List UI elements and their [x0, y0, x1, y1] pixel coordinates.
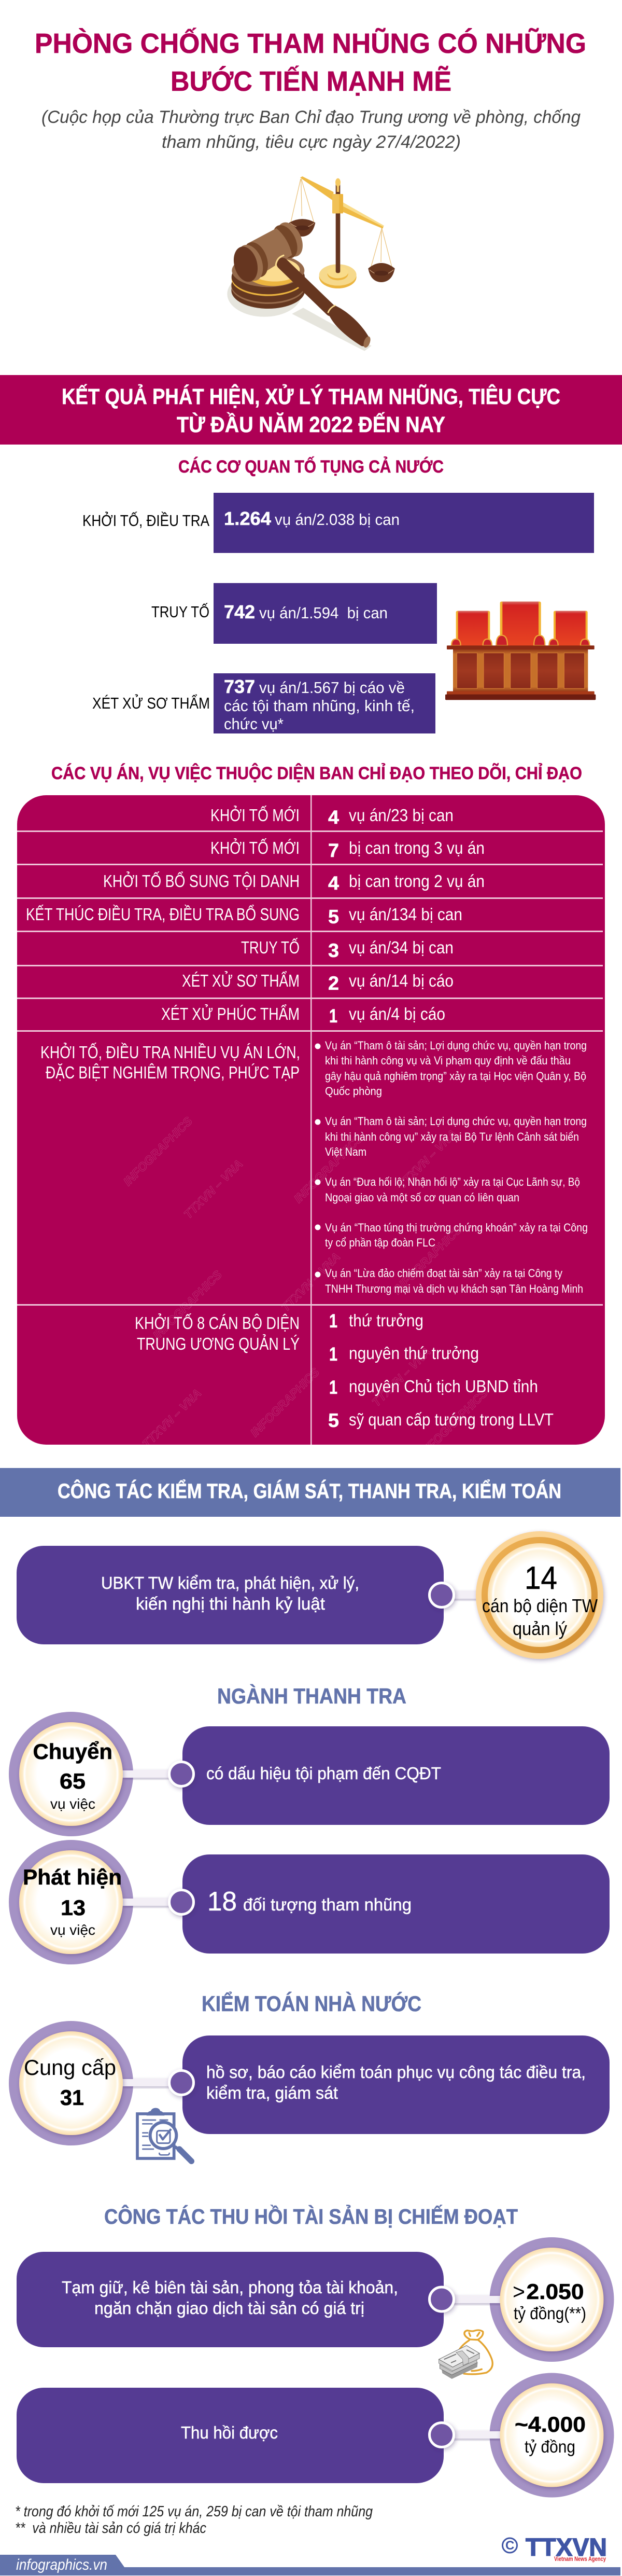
- list: officials: thứ trưởng: [349, 1311, 423, 1330]
- bullet list: major cases: Vụ án “Lừa đảo chiếm đoạt tài sản” xảy ra tại Công ty: [325, 1267, 562, 1280]
- icon: scales: [289, 176, 395, 288]
- row: khởi tố bổ sung tội danh: 4: [328, 872, 339, 894]
- callout: UBKT TW: kiến nghị thi hành kỷ luật: [136, 1594, 325, 1613]
- row: khởi tố bổ sung tội danh: bị can trong 2 vụ án: [349, 871, 485, 891]
- callout: phát hiện 13 vụ việc: vụ việc: [50, 1922, 95, 1938]
- row: khởi tố bổ sung tội danh: KHỞI TỐ BỔ SUNG TỘI DANH: [103, 871, 300, 891]
- bar: truy tố: vụ án/1.594 bị can: [259, 604, 388, 622]
- heading: asset recovery: CÔNG TÁC THU HỒI TÀI SẢN BỊ CHIẾM ĐOẠT: [104, 2205, 518, 2228]
- row: kết thúc điều tra: KẾT THÚC ĐIỀU TRA, ĐIỀU TRA BỔ SUNG: [26, 905, 300, 924]
- bar: truy tố: 742: [224, 601, 255, 622]
- callout: cung cấp 31: kiểm tra, giám sát: [206, 2083, 338, 2102]
- bar: xét xử sơ thẩm: 737: [224, 676, 255, 697]
- row: khởi tố mới 2: bị can trong 3 vụ án: [349, 838, 485, 857]
- icon: gavel and scales: [227, 176, 395, 351]
- logo: TTXVN: C: [505, 2539, 514, 2553]
- callout: tạm giữ: 2.050: [527, 2279, 584, 2304]
- logo: TTXVN: Vietnam News Agency: [554, 2555, 606, 2563]
- panel: cases table: [17, 795, 605, 1460]
- callout: thu hồi được: tỷ đồng: [525, 2437, 575, 2456]
- row: truy tố: vụ án/34 bị can: [349, 938, 454, 957]
- callout: tạm giữ: >: [513, 2279, 525, 2304]
- list: officials: [328, 1310, 554, 1431]
- heading: agencies: CÁC CƠ QUAN TỐ TỤNG CẢ NƯỚC: [178, 456, 444, 477]
- callout: cung cấp 31: Cung cấp: [24, 2055, 116, 2080]
- bar: khởi tố, điều tra: KHỞI TỐ, ĐIỀU TRA: [82, 511, 209, 530]
- bar: xét xử sơ thẩm: vụ án/1.567 bị cáo về: [259, 678, 405, 697]
- logo: TTXVN: TTXVN: [526, 2534, 607, 2561]
- bar: khởi tố, điều tra: vụ án/2.038 bị can: [275, 510, 400, 529]
- row: xét xử sơ thẩm: 2: [328, 973, 339, 994]
- callout: chuyển 65 vụ việc: vụ việc: [50, 1796, 95, 1812]
- bullet list: major cases: Vụ án “Đưa hối lộ; Nhận hối lộ” xảy ra tại Cục Lãnh sự, Bộ: [325, 1175, 580, 1188]
- bar: xét xử sơ thẩm: XÉT XỬ SƠ THẨM: [92, 694, 210, 712]
- subtitle: tham nhũng, tiêu cực ngày 27/4/2022): [162, 132, 461, 152]
- panel: cases table: INFOGRAPHICS: [390, 1222, 464, 1297]
- row: xét xử phúc thẩm: XÉT XỬ PHÚC THẨM: [161, 1004, 300, 1023]
- row: xét xử phúc thẩm: [161, 1004, 445, 1027]
- heading: ngành thanh tra: NGÀNH THANH TRA: [217, 1684, 406, 1708]
- list: officials: 5: [328, 1410, 339, 1431]
- subtitle: (Cuộc họp của Thường trực Ban Chỉ đạo Trung ương về phòng, chống: [41, 107, 581, 127]
- bullet list: major cases: khi thi hành công vụ và Vi phạm quy định về đấu thầu: [325, 1054, 571, 1067]
- bullet list: major cases: Vụ án “Tham ô tài sản; Lợi dụng chức vụ, quyền hạn trong: [325, 1115, 587, 1128]
- icon: clipboard with magnifier: [137, 2108, 191, 2161]
- row: khởi tố bổ sung tội danh: [103, 871, 485, 894]
- row: khởi tố mới 1: KHỞI TỐ MỚI: [210, 805, 300, 825]
- footer bar: [0, 2555, 620, 2575]
- callout: thu hồi được: Thu hồi được: [181, 2423, 278, 2442]
- row: truy tố: TRUY TỐ: [241, 937, 300, 957]
- row: khởi tố mới 1: vụ án/23 bị can: [349, 806, 454, 825]
- section banner: results: [0, 375, 622, 445]
- row: truy tố: 3: [328, 940, 339, 961]
- callout: cung cấp 31: [9, 2021, 610, 2145]
- section banner: inspection: [0, 1468, 620, 1517]
- list: officials: nguyên Chủ tịch UBND tỉnh: [349, 1377, 538, 1396]
- row: xét xử sơ thẩm: [182, 971, 454, 994]
- callout: chuyển 65 vụ việc: [9, 1712, 610, 1836]
- callout: tạm giữ: [17, 2237, 614, 2362]
- row: xét xử sơ thẩm: vụ án/14 bị cáo: [349, 971, 454, 990]
- panel: cases table: INFOGRAPHICS: [416, 1386, 490, 1460]
- subtitle: [41, 107, 581, 152]
- list: officials: 1: [329, 1344, 337, 1365]
- list: officials: sỹ quan cấp tướng trong LLVT: [349, 1410, 554, 1429]
- bullet list: major cases: ty cổ phần tập đoàn FLC: [325, 1236, 435, 1249]
- row: officials label: KHỞI TỐ 8 CÁN BỘ DIỆN: [135, 1313, 300, 1333]
- panel: cases table: TTXVN – VNA: [369, 1345, 433, 1409]
- callout: cung cấp 31: hồ sơ, báo cáo kiểm toán phục vụ công tác điều tra,: [206, 2062, 586, 2082]
- callout: UBKT TW: UBKT TW kiểm tra, phát hiện, xử lý,: [101, 1573, 359, 1592]
- row: khởi tố mới 2: [210, 838, 485, 861]
- title: BƯỚC TIẾN MẠNH MẼ: [171, 66, 451, 97]
- panel: cases table: TTXVN – VNA: [139, 1386, 204, 1450]
- footnotes: ** và nhiều tài sản có giá trị khác: [15, 2520, 206, 2537]
- title: PHÒNG CHỐNG THAM NHŨNG CÓ NHỮNG: [35, 28, 586, 59]
- bullet list: major cases: [315, 1039, 588, 1295]
- bar: khởi tố, điều tra: [82, 493, 594, 553]
- callout: chuyển 65 vụ việc: Chuyển: [33, 1739, 112, 1764]
- row: major cases label: KHỞI TỐ, ĐIỀU TRA NHIỀU VỤ ÁN LỚN,: [40, 1042, 300, 1062]
- section banner: results: TỪ ĐẦU NĂM 2022 ĐẾN NAY: [177, 412, 445, 437]
- callout: phát hiện 13 vụ việc: đối tượng tham nhũng: [243, 1895, 412, 1914]
- callout: thu hồi được: ~4.000: [515, 2412, 586, 2436]
- row: truy tố: [241, 937, 454, 961]
- row: khởi tố mới 1: [210, 805, 454, 828]
- row: officials label: [135, 1313, 300, 1353]
- callout: phát hiện 13 vụ việc: 18: [207, 1887, 237, 1917]
- row: kết thúc điều tra: 5: [328, 906, 339, 927]
- row: xét xử phúc thẩm: vụ án/4 bị cáo: [349, 1004, 445, 1023]
- panel: cases table: INFOGRAPHICS: [150, 1267, 224, 1342]
- footer bar: infographics.vn: [16, 2556, 107, 2573]
- icon: court bench: [445, 602, 596, 700]
- bar: xét xử sơ thẩm: [92, 673, 435, 733]
- callout: tạm giữ: Tạm giữ, kê biên tài sản, phong tỏa tài khoản,: [62, 2278, 398, 2297]
- icon: money bag: [439, 2330, 492, 2379]
- footnotes: * trong đó khởi tố mới 125 vụ án, 259 bị can về tội tham nhũng: [15, 2503, 373, 2520]
- bullet list: major cases: Việt Nam: [325, 1145, 366, 1158]
- row: officials label: TRUNG ƯƠNG QUẢN LÝ: [137, 1334, 300, 1353]
- row: xét xử phúc thẩm: 1: [329, 1005, 337, 1027]
- panel: cases table: TTXVN – VNA: [181, 1157, 245, 1221]
- callout: UBKT TW: 14: [525, 1560, 557, 1596]
- callout: UBKT TW: [17, 1531, 603, 1659]
- icon: gavel: [227, 218, 372, 351]
- row: major cases label: ĐẶC BIỆT NGHIÊM TRỌNG, PHỨC TẠP: [46, 1063, 300, 1082]
- row: xét xử sơ thẩm: XÉT XỬ SƠ THẨM: [182, 971, 300, 990]
- list: officials: 1: [329, 1377, 337, 1398]
- callout: chuyển 65 vụ việc: 65: [60, 1769, 86, 1793]
- callout: chuyển 65 vụ việc: có dấu hiệu tội phạm đến CQĐT: [206, 1764, 441, 1783]
- row: khởi tố mới 2: KHỞI TỐ MỚI: [210, 838, 300, 857]
- title: [35, 28, 586, 97]
- callout: thu hồi được: [17, 2373, 614, 2497]
- panel: cases table: INFOGRAPHICS: [291, 1131, 365, 1206]
- row: khởi tố mới 2: 7: [328, 840, 339, 861]
- panel: cases table: INFOGRAPHICS: [248, 1365, 322, 1439]
- heading: kiểm toán nhà nước: KIỂM TOÁN NHÀ NƯỚC: [202, 1991, 421, 2016]
- callout: phát hiện 13 vụ việc: Phát hiện: [23, 1865, 122, 1889]
- row: major cases label: [40, 1042, 300, 1082]
- bullet list: major cases: Vụ án “Thao túng thị trường chứng khoán” xảy ra tại Công: [325, 1221, 588, 1234]
- row: khởi tố mới 1: 4: [328, 807, 339, 828]
- callout: tạm giữ: ngăn chặn giao dịch tài sản có giá trị: [94, 2298, 364, 2318]
- bar: xét xử sơ thẩm: các tội tham nhũng, kinh tế,: [224, 697, 415, 715]
- footnotes: [15, 2503, 373, 2537]
- bar: truy tố: [151, 583, 437, 644]
- callout: UBKT TW: cán bộ diện TW: [482, 1595, 598, 1616]
- list: officials: nguyên thứ trưởng: [349, 1344, 479, 1363]
- bar: truy tố: TRUY TỐ: [151, 602, 209, 621]
- callout: cung cấp 31: 31: [60, 2085, 84, 2110]
- row: kết thúc điều tra: [26, 905, 462, 927]
- bar: khởi tố, điều tra: 1.264: [224, 508, 271, 529]
- bullet list: major cases: Quốc phòng: [325, 1085, 382, 1098]
- row: kết thúc điều tra: vụ án/134 bị can: [349, 905, 462, 924]
- panel: cases table: INFOGRAPHICS: [121, 1114, 195, 1188]
- bar: xét xử sơ thẩm: chức vụ*: [224, 715, 284, 733]
- callout: UBKT TW: quản lý: [513, 1618, 567, 1639]
- callout: tạm giữ: tỷ đồng(**): [514, 2304, 586, 2323]
- callout: phát hiện 13 vụ việc: 13: [61, 1895, 86, 1920]
- callout: phát hiện 13 vụ việc: [9, 1840, 610, 1964]
- bullet list: major cases: Ngoại giao và một số cơ quan có liên quan: [325, 1191, 519, 1204]
- panel: cases table: TTXVN – VNA: [278, 1250, 343, 1314]
- bullet list: major cases: gây hậu quả nghiêm trọng” xảy ra tại Học viện Quân y, Bộ: [325, 1070, 586, 1083]
- panel: cases table: TTXVN – VNA: [395, 1127, 459, 1191]
- bullet list: major cases: khi thi hành công vụ” xảy ra tại Bộ Tư lệnh Cảnh sát biển: [325, 1130, 579, 1143]
- bullet list: major cases: Vụ án “Tham ô tài sản; Lợi dụng chức vụ, quyền hạn trong: [325, 1039, 587, 1052]
- list: officials: 1: [329, 1310, 337, 1332]
- bullet list: major cases: TNHH Thương mại và dịch vụ khách sạn Tân Hoàng Minh: [325, 1282, 583, 1295]
